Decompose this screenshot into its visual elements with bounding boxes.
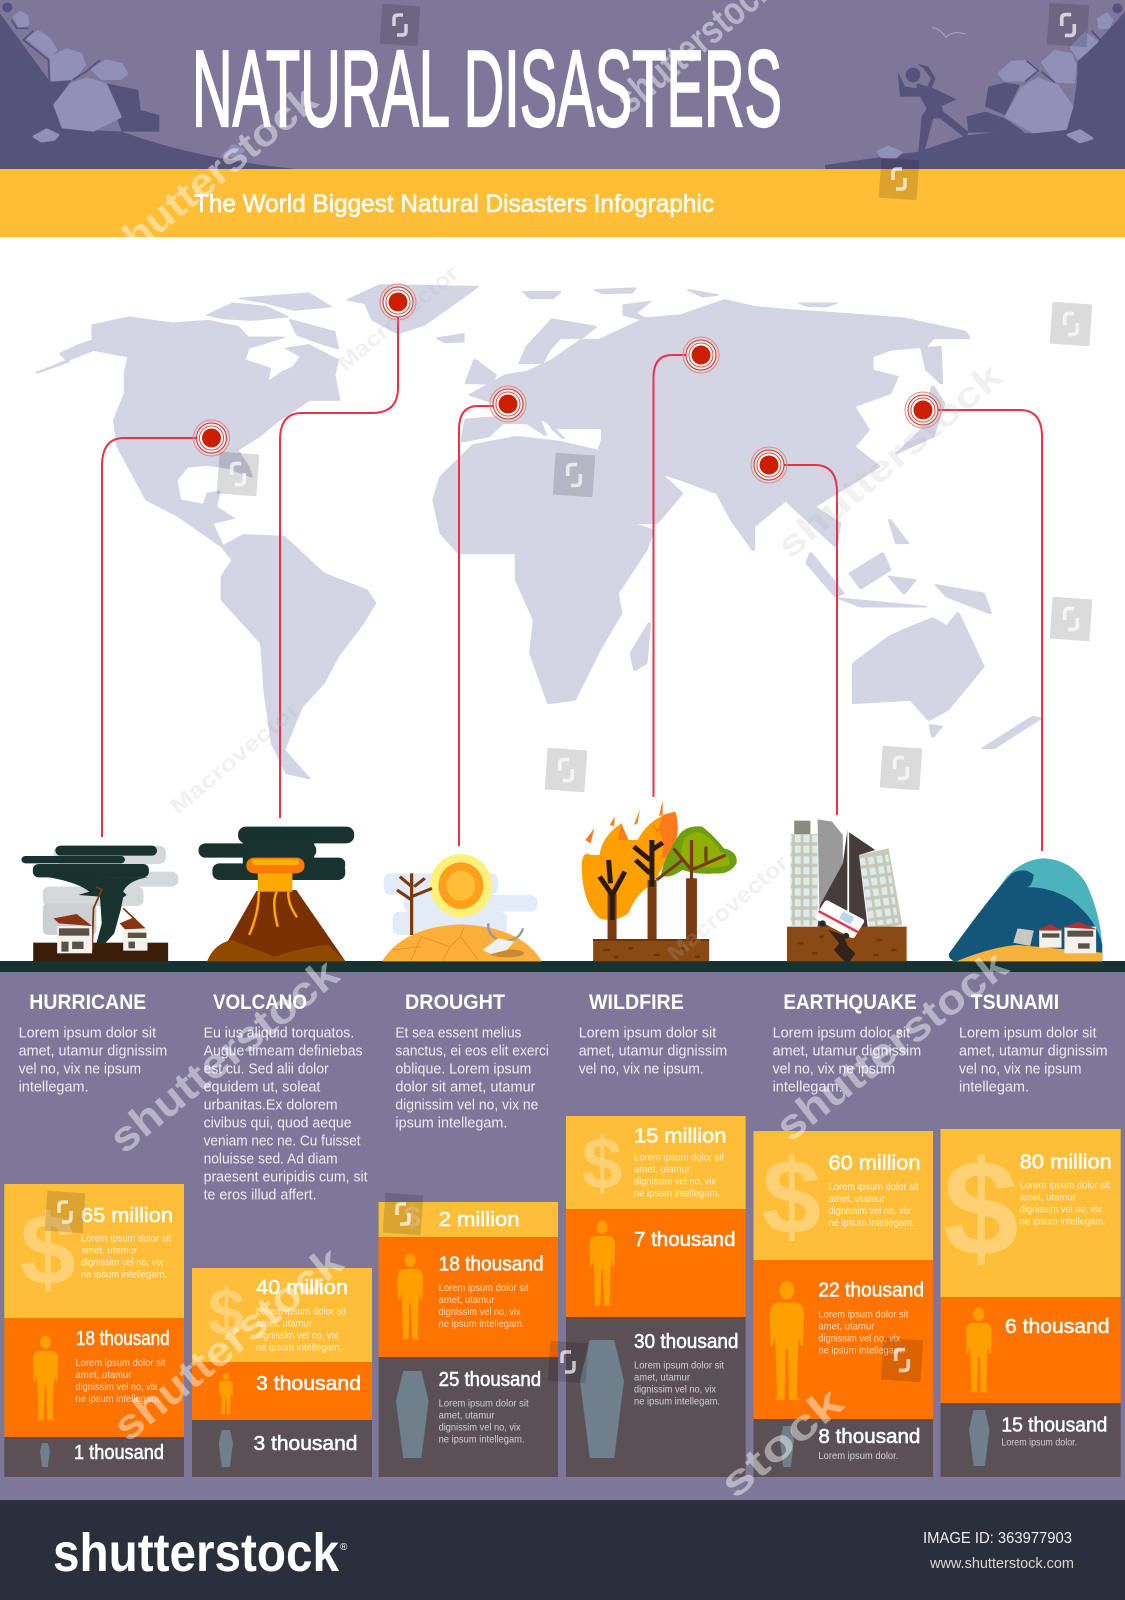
line: wildfire: [654, 355, 701, 797]
image id: IMAGE ID: 363977903: [923, 1530, 1072, 1547]
stacked bar: hurricane: dignissim vel no, vix: [81, 1257, 164, 1269]
landslide right with falling person: [825, 3, 1125, 169]
column 2 heading and text: volcano: equidem ut, soleat: [204, 1080, 320, 1096]
illustration: earthquake: [787, 819, 907, 961]
column 2 heading and text: volcano: [204, 991, 368, 1204]
stacked bar: tsunami: Lorem ipsum dolor sit: [1020, 1180, 1110, 1192]
stacked bar: earthquake: [754, 1131, 933, 1477]
column 5 heading and text: earthquake: vel no, vix ne ipsum: [773, 1062, 895, 1078]
column 4 heading and text: wildfire: amet, utamur dignissim: [579, 1044, 727, 1060]
column 4 heading and text: wildfire: vel no, vix ne ipsum.: [579, 1062, 704, 1078]
column 1 heading and text: hurricane: [19, 991, 167, 1096]
stacked bar: wildfire: ne ipsum intellegam.: [634, 1396, 720, 1408]
column 6 heading and text: tsunami: [959, 991, 1108, 1096]
watermark: shutterstock panel three: shutterstock: [767, 940, 1017, 1150]
stacked bar: earthquake: ne ipsum intellegam.: [818, 1344, 904, 1356]
column 1 heading and text: hurricane: Lorem ipsum dolor sit: [19, 1026, 156, 1042]
column 3 heading and text: drought: [395, 991, 549, 1132]
stacked bar: drought: $: [404, 1201, 421, 1234]
column 5 heading and text: earthquake: Lorem ipsum dolor sit: [773, 1026, 910, 1042]
column 2 heading and text: volcano: veniam nec ne. Cu fuisset: [204, 1134, 361, 1150]
column 2 heading and text: volcano: VOLCANO: [213, 991, 307, 1014]
stacked bar: hurricane: amet, utamur: [76, 1369, 132, 1381]
stacked bar: volcano: 40 million: [256, 1276, 348, 1299]
watermark: macrovector illustration: Macrovector: [662, 850, 793, 966]
column 5 heading and text: earthquake: [773, 991, 921, 1096]
iceland: [438, 334, 463, 342]
stacked bar: volcano: $: [208, 1275, 245, 1349]
subtitle band: The World Biggest Natural Disasters Infographic: [194, 190, 714, 218]
stacked bar: drought: Lorem ipsum dolor sit: [439, 1282, 529, 1294]
stacked bar: drought: amet, utamur: [439, 1294, 495, 1306]
north america: [37, 317, 339, 547]
stacked bar: earthquake: $: [762, 1138, 821, 1256]
stacked bar: tsunami: dignissim vel no, vix: [1020, 1204, 1102, 1216]
stacked bar: hurricane: ne ipsum intellegam.: [76, 1393, 162, 1405]
southeast asia islands: [807, 520, 990, 613]
stacked bar: hurricane: 1 thousand: [74, 1441, 164, 1464]
stacked bar: earthquake: Lorem ipsum dolor sit: [828, 1181, 919, 1193]
stacked bar: earthquake: dignissim vel no, vix: [818, 1332, 901, 1344]
column 2 heading and text: volcano: Augue timeam definiebas: [204, 1044, 363, 1060]
stacked bar: earthquake: ne ipsum intellegam.: [828, 1217, 914, 1229]
column 5 heading and text: earthquake: EARTHQUAKE: [783, 991, 917, 1014]
stacked bar: earthquake: Lorem ipsum dolor.: [818, 1450, 898, 1462]
stacked bar: hurricane: amet, utamur: [81, 1245, 137, 1257]
stacked bar: drought: [379, 1201, 558, 1477]
stacked bar: volcano: 3 thousand: [254, 1432, 358, 1455]
stacked bar: volcano: dignissim vel no, vix: [256, 1329, 339, 1341]
world map: [37, 285, 1040, 778]
stacked bar: tsunami: 6 thousand: [1005, 1315, 1110, 1338]
africa: [434, 437, 653, 703]
watermark: shutterstock panel two: shutterstock: [104, 1237, 352, 1450]
watermark: shutterstock panel four: stock: [711, 1377, 853, 1507]
stacked bar: drought: dignissim vel no, vix: [439, 1306, 521, 1318]
stacked bar: drought: ne ipsum intellegam.: [439, 1434, 525, 1446]
column 4 heading and text: wildfire: Lorem ipsum dolor sit: [579, 1026, 716, 1042]
watermark: shutterstock map: shutterstock: [769, 354, 1011, 566]
illustration: tsunami: [949, 858, 1102, 961]
greenland: [348, 285, 477, 333]
illustration: hurricane: [21, 846, 179, 961]
stacked bar: tsunami: 80 million: [1020, 1150, 1112, 1173]
column 1 heading and text: hurricane: amet, utamur dignissim: [19, 1044, 167, 1060]
stacked bar: drought: amet, utamur: [439, 1410, 495, 1422]
stacked bar: wildfire: dignissim vel no, vix: [634, 1384, 717, 1396]
stacked bar: drought: ne ipsum intellegam.: [439, 1318, 525, 1330]
column 4 heading and text: wildfire: [579, 991, 727, 1078]
column 3 heading and text: drought: ipsum intellegam.: [395, 1116, 507, 1132]
illustration: wildfire: [582, 800, 737, 961]
stacked bar: earthquake: 22 thousand: [818, 1279, 924, 1302]
column 5 heading and text: earthquake: intellegam.: [773, 1080, 843, 1096]
stacked bar: volcano: Lorem ipsum dolor sit: [256, 1305, 346, 1317]
stacked bar: wildfire: 7 thousand: [634, 1228, 736, 1251]
header banner: [0, 0, 1125, 170]
column 2 heading and text: volcano: te eros illud affert.: [204, 1188, 317, 1204]
column 2 heading and text: volcano: praesent euripidis cum, sit: [204, 1170, 368, 1186]
new zealand: [983, 717, 1040, 748]
column 1 heading and text: hurricane: HURRICANE: [29, 991, 146, 1014]
stacked bar: volcano: ne ipsum intellegam.: [256, 1341, 342, 1353]
stacked bar: earthquake: dignissim vel no, vix: [828, 1205, 911, 1217]
column 6 heading and text: tsunami: amet, utamur dignissim: [959, 1044, 1108, 1060]
column 3 heading and text: drought: oblique. Lorem ipsum: [395, 1062, 531, 1078]
stacked bar: drought: 25 thousand: [439, 1368, 541, 1391]
stacked bar: earthquake: amet, utamur: [818, 1320, 875, 1332]
stacked bar: earthquake: 8 thousand: [818, 1425, 920, 1448]
column 6 heading and text: tsunami: TSUNAMI: [971, 991, 1059, 1014]
south america: [222, 535, 375, 778]
stacked bar: wildfire: ne ipsum intellegam.: [634, 1187, 720, 1199]
column 3 heading and text: drought: dolor sit amet, utamur: [395, 1080, 536, 1096]
line: hurricane: [102, 438, 211, 837]
pin: drought: [490, 386, 526, 422]
kamchatka and japan: [897, 347, 944, 453]
pin: earthquake: [751, 447, 787, 483]
stacked bar: hurricane: $: [20, 1194, 76, 1306]
scandinavia: [520, 319, 596, 363]
stacked bar: earthquake: 60 million: [828, 1151, 920, 1174]
stacked bar: earthquake: Lorem ipsum dolor sit: [818, 1308, 908, 1320]
stacked bar: volcano: amet, utamur: [256, 1317, 312, 1329]
column 3 heading and text: drought: sanctus, ei eos elit exerci: [395, 1044, 549, 1060]
column 2 heading and text: volcano: est cu. Sed alii dolor: [204, 1062, 329, 1078]
stacked bar: volcano: 3 thousand: [256, 1372, 361, 1395]
stacked bar: tsunami: [940, 1129, 1121, 1477]
column 2 heading and text: volcano: urbanitas.Ex dolorem: [204, 1098, 338, 1114]
stacked bar: hurricane: [4, 1184, 184, 1477]
pin: wildfire: [683, 337, 719, 373]
column 2 heading and text: volcano: Eu ius aliquid torquatos.: [204, 1026, 354, 1042]
watermark: macrovector map top: Macrovector: [332, 260, 463, 376]
stacked bar: tsunami: Lorem ipsum dolor.: [1001, 1437, 1077, 1449]
stacked bar: tsunami: $: [943, 1132, 1019, 1284]
stacked bar: wildfire: Lorem ipsum dolor sit: [634, 1151, 724, 1163]
registered mark: ®: [340, 1542, 348, 1553]
stacked bar: tsunami: amet, utamur: [1020, 1192, 1076, 1204]
pin: hurricane: [194, 420, 230, 456]
column 6 heading and text: tsunami: vel no, vix ne ipsum: [959, 1062, 1082, 1078]
line: tsunami: [923, 410, 1042, 851]
stacked bar: hurricane: dignissim vel no, vix: [76, 1381, 158, 1393]
stacked bar: hurricane: 65 million: [81, 1204, 173, 1227]
stacked bar: wildfire: amet, utamur: [634, 1372, 690, 1384]
arctic islands: [208, 288, 836, 348]
stacked bar: earthquake: amet, utamur: [828, 1193, 885, 1205]
line: volcano: [280, 302, 398, 818]
ground strip: [0, 961, 1125, 972]
madagascar: [631, 623, 649, 670]
column 2 heading and text: volcano: civibus qui, quod aeque: [204, 1116, 352, 1132]
stacked bar: tsunami: ne ipsum intellegam.: [1020, 1216, 1106, 1228]
stacked bar: wildfire: dignissim vel no, vix: [634, 1175, 717, 1187]
stacked bar: wildfire: [566, 1116, 746, 1477]
stacked bar: wildfire: Lorem ipsum dolor sit: [634, 1360, 724, 1372]
column 2 heading and text: volcano: noluisse sed. Ad diam: [204, 1152, 338, 1168]
watermark: shutterstock panel one: shutterstock: [100, 949, 348, 1162]
stacked bar: hurricane: Lorem ipsum dolor sit: [81, 1233, 171, 1245]
footer bar: [0, 1500, 1125, 1600]
stacked bar: drought: Lorem ipsum dolor sit: [439, 1398, 529, 1410]
subtitle band: [0, 169, 1125, 237]
column 6 heading and text: tsunami: Lorem ipsum dolor sit: [959, 1026, 1096, 1042]
stacked bar: wildfire: 30 thousand: [634, 1330, 738, 1353]
column 3 heading and text: drought: Et sea essent melius: [395, 1026, 521, 1042]
stacked bar: drought: 2 million: [439, 1208, 520, 1231]
stacked bar: volcano: [192, 1268, 372, 1477]
pin: volcano: [380, 284, 416, 320]
lower purple panel: [0, 972, 1125, 1500]
stacked bar: drought: 18 thousand: [439, 1253, 544, 1276]
line: drought: [459, 406, 508, 846]
watermark: shutterstock header: shutterstock: [96, 77, 326, 275]
stacked bar: hurricane: 18 thousand: [76, 1327, 170, 1350]
stacked bar: hurricane: ne ipsum intellegam.: [81, 1269, 167, 1281]
column 1 heading and text: hurricane: vel no, vix ne ipsum: [19, 1062, 141, 1078]
stacked bar: wildfire: 15 million: [634, 1125, 726, 1148]
column 6 heading and text: tsunami: intellegam.: [959, 1080, 1029, 1096]
footer logo: shutterstock: [53, 1523, 340, 1583]
column 3 heading and text: drought: DROUGHT: [405, 991, 505, 1014]
stacked bar: tsunami: 15 thousand: [1001, 1414, 1107, 1437]
illustration: drought: [382, 854, 542, 961]
watermark: macrovector map bottom: Macrovector: [165, 696, 304, 819]
eurasia: [463, 300, 969, 550]
column 5 heading and text: earthquake: amet, utamur dignissim: [773, 1044, 921, 1060]
illustration: volcano: [198, 827, 354, 961]
uk: [466, 360, 495, 384]
stacked bar: wildfire: amet, utamur: [634, 1163, 690, 1175]
column 3 heading and text: drought: dignissim vel no, vix ne: [395, 1098, 538, 1114]
website: www.shutterstock.com: [929, 1555, 1074, 1572]
pin: tsunami: [905, 392, 941, 428]
line: earthquake: [769, 465, 837, 815]
stacked bar: drought: dignissim vel no, vix: [439, 1422, 521, 1434]
australia: [854, 613, 983, 737]
stacked bar: wildfire: $: [582, 1124, 622, 1204]
landslide left: [0, 2, 300, 169]
column 4 heading and text: wildfire: WILDFIRE: [589, 991, 684, 1014]
column 1 heading and text: hurricane: intellegam.: [19, 1080, 89, 1096]
stacked bar: hurricane: Lorem ipsum dolor sit: [76, 1357, 166, 1369]
